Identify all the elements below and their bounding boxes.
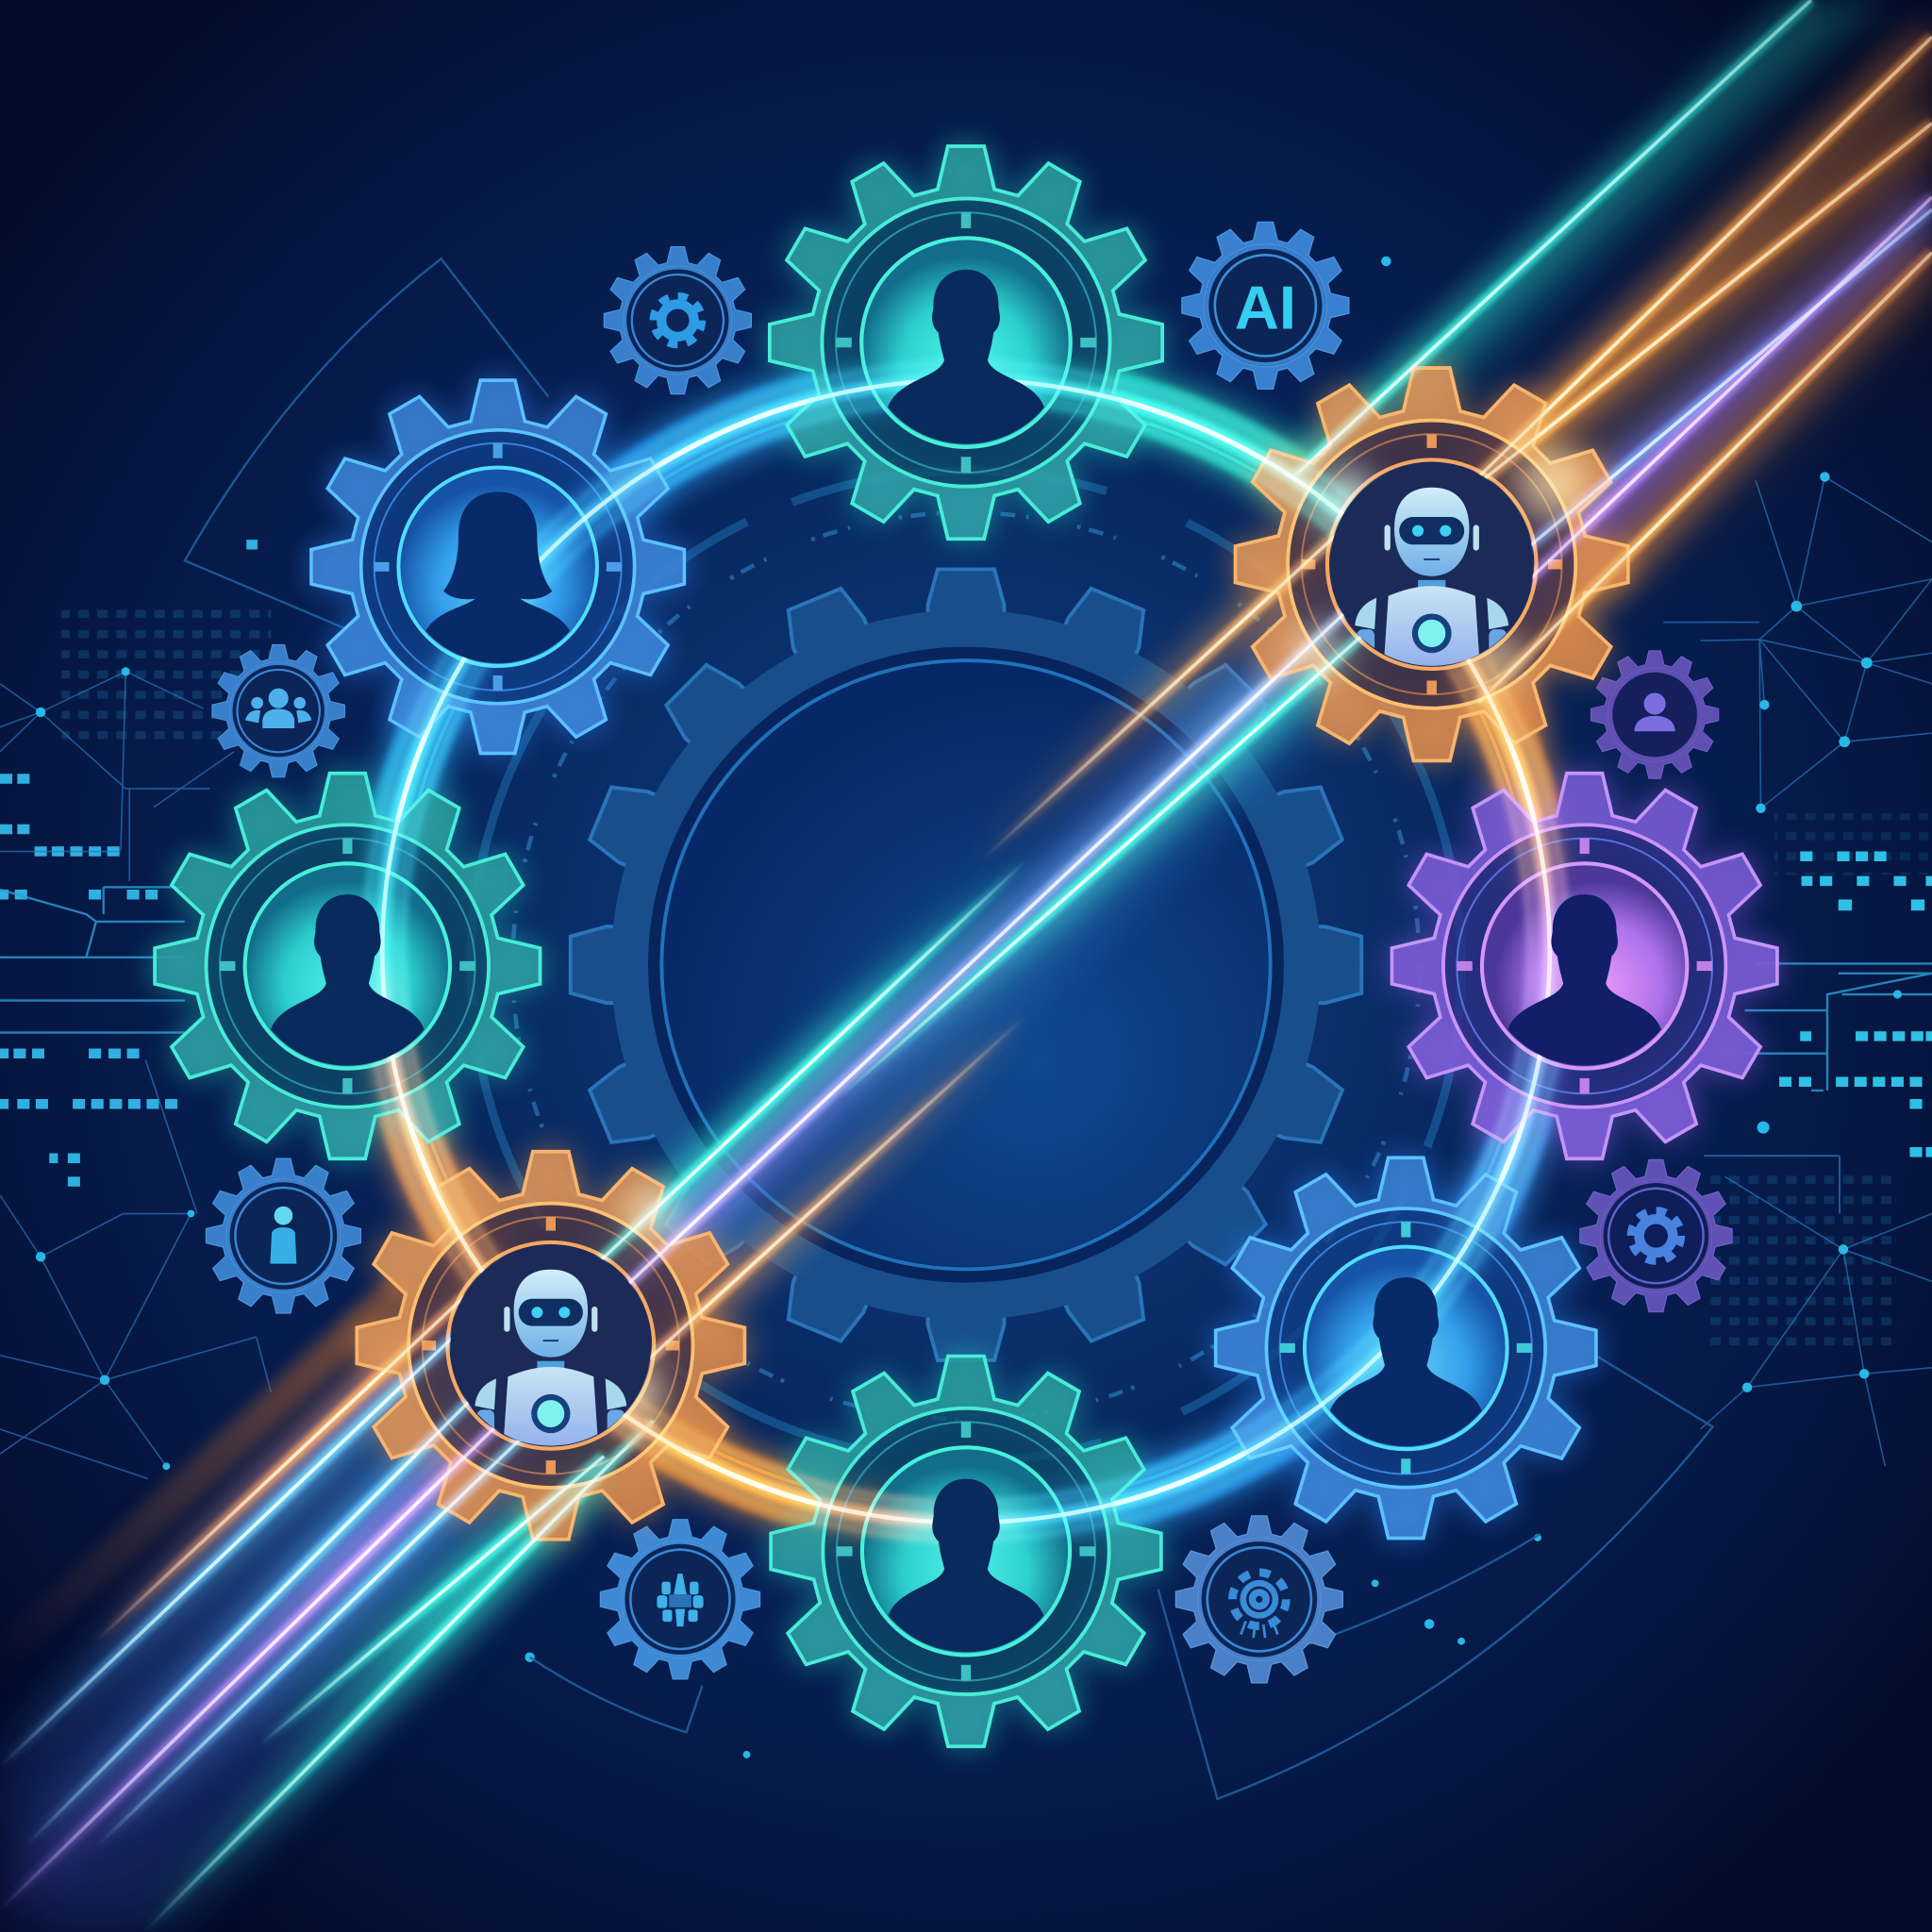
avatar: woman: [425, 491, 570, 663]
small gear: team: [212, 644, 344, 777]
gear: teal left: [155, 774, 541, 1158]
small gear: settings: [604, 247, 751, 394]
gear: blue upper left: [311, 380, 684, 754]
gear: orange lower left: [357, 1152, 744, 1540]
avatar: man, lower right: [1330, 1277, 1481, 1447]
gear: orange upper right: [1236, 368, 1628, 760]
data pattern: left and right pixel grids: [0, 540, 1932, 1353]
icon: eye gear: [1232, 1573, 1286, 1638]
small gear: network emblem: [600, 1520, 760, 1679]
gear: purple right: [1391, 774, 1777, 1158]
AI label: AI: [1235, 274, 1296, 342]
avatar: robot, lower left: [451, 1255, 651, 1446]
icon: gear: [654, 297, 701, 344]
small gear: vision gear: [1175, 1516, 1342, 1683]
small gear: purple person: [1591, 651, 1719, 778]
gear: teal top: [770, 146, 1162, 539]
small gear: person: [206, 1158, 360, 1313]
gear: blue lower right: [1216, 1158, 1596, 1539]
icon: group of people: [245, 689, 311, 728]
avatar: man, bottom: [889, 1479, 1043, 1653]
network nodes: [36, 257, 1902, 1758]
central large gear: [555, 553, 1377, 1376]
glowing ring underlayer: [358, 357, 1573, 1545]
icon: standing person: [270, 1207, 296, 1264]
circuit traces: [0, 887, 1932, 1091]
small gear: AI: [1182, 222, 1349, 389]
decorative wedge outlines: [185, 258, 1713, 1799]
icon: person: [1634, 692, 1675, 731]
avatar: man, top: [888, 270, 1044, 444]
avatar: robot, upper right: [1331, 471, 1534, 666]
gear: teal bottom: [771, 1357, 1161, 1746]
small gear: purple settings: [1580, 1159, 1732, 1312]
network lines: [0, 476, 1932, 1478]
icon: gear: [1632, 1211, 1680, 1260]
orbit arcs around the central gear: [471, 471, 1461, 1461]
avatar: man, left: [271, 894, 425, 1066]
icon: emblem: [657, 1574, 704, 1626]
avatar: man, right: [1507, 894, 1661, 1066]
